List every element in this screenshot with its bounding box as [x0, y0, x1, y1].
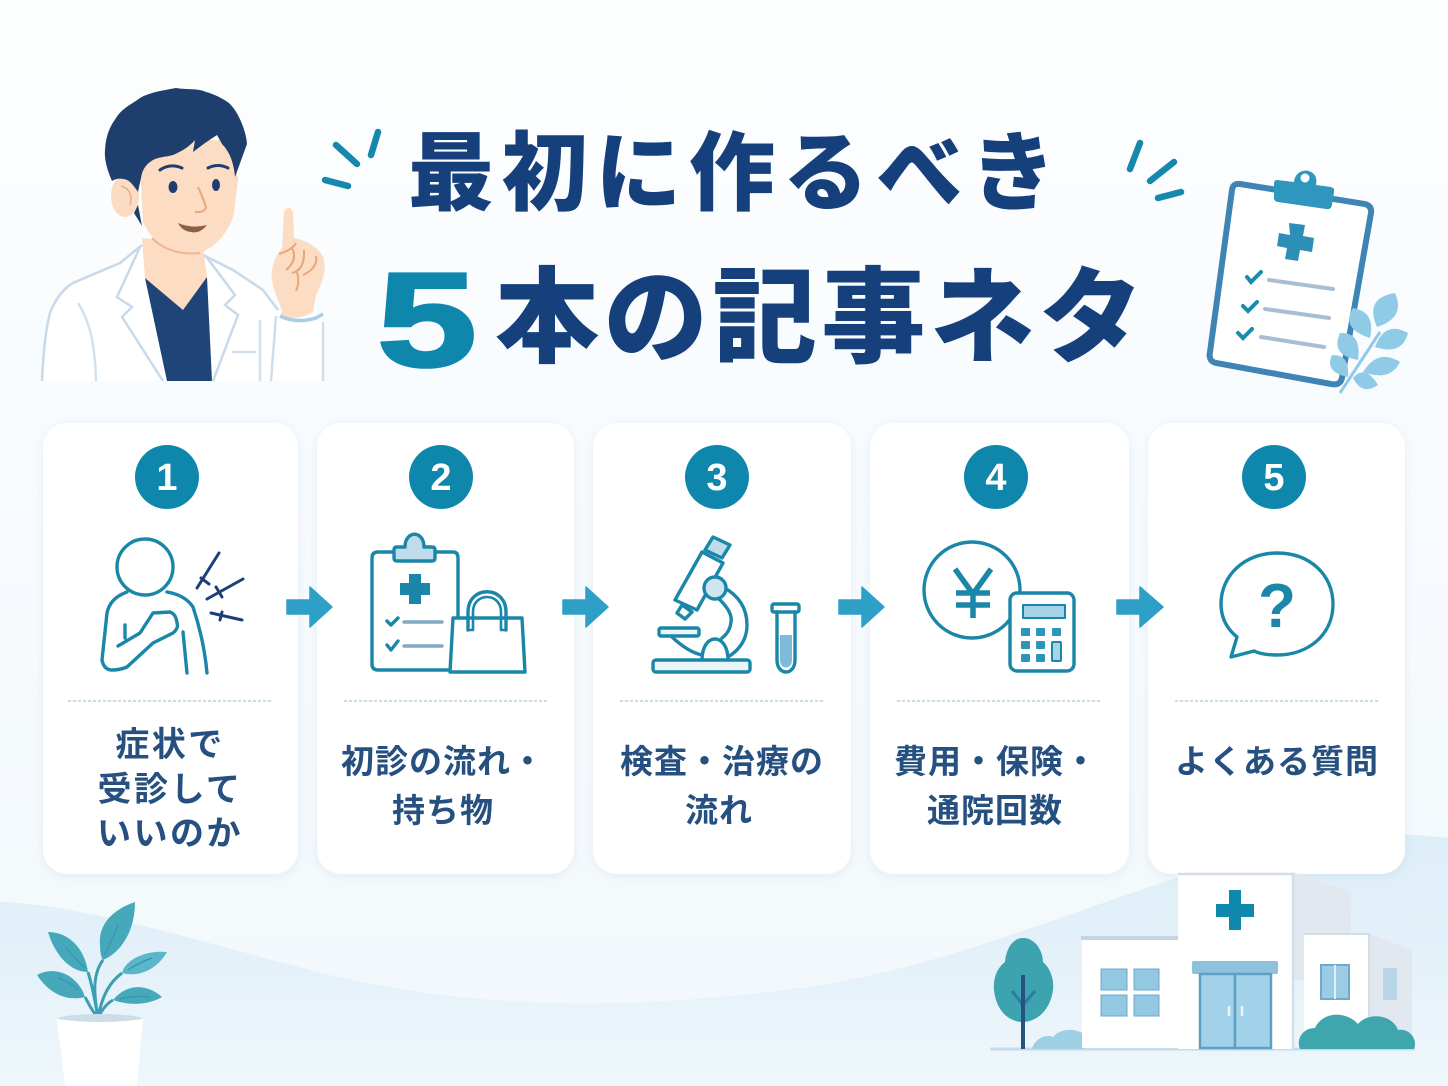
door [1200, 974, 1271, 1048]
hair [105, 88, 247, 192]
label: 流れ [685, 792, 753, 829]
main block [1178, 873, 1293, 1049]
icon: question bubble [1221, 553, 1333, 657]
arrow 2 [563, 587, 608, 627]
card 1 [43, 423, 298, 874]
icon: microscope and test tube [653, 537, 799, 672]
bush right [1299, 1015, 1415, 1049]
icon: yen and calculator [924, 542, 1074, 671]
label: 受診して [98, 771, 242, 809]
icon: clipboard and bag [372, 534, 525, 672]
lapels [117, 247, 238, 381]
badge 2 [409, 445, 473, 509]
badge 2: 2 [430, 457, 452, 499]
title: 本の記事ネタ [495, 261, 1143, 377]
badge 4 [964, 445, 1028, 509]
cross [1216, 890, 1254, 930]
card 4 [870, 423, 1129, 874]
title: 最初に作るべき [408, 126, 1056, 222]
sparkle lines right [1130, 143, 1181, 198]
badge 1: 1 [156, 457, 178, 499]
badge 3 [685, 445, 749, 509]
divider [897, 700, 1102, 702]
canopy [1192, 961, 1278, 974]
clipboard illustration [1210, 171, 1371, 384]
divider [68, 700, 272, 702]
badge 5 [1242, 445, 1306, 509]
potted plant [37, 902, 167, 1086]
left wing [1082, 938, 1180, 1048]
card 5 [1148, 423, 1405, 874]
divider [1175, 700, 1380, 702]
background wave [0, 835, 1448, 1086]
badge 4: 4 [985, 457, 1007, 499]
doctor illustration [42, 88, 325, 381]
hand [272, 208, 325, 318]
label: 症状で [115, 726, 225, 764]
sleeve [272, 312, 324, 381]
side wall [1293, 872, 1351, 980]
title: 5 [377, 245, 477, 395]
arrow 3 [839, 587, 884, 627]
right wing [1368, 933, 1412, 1048]
label: 費用・保険・ [894, 743, 1098, 780]
label: 持ち物 [392, 792, 494, 829]
neck [142, 238, 207, 310]
label: 通院回数 [927, 792, 1063, 829]
title [377, 126, 1143, 395]
face [140, 140, 238, 255]
white coat [42, 245, 278, 381]
tree [994, 938, 1053, 1049]
scrubs [145, 277, 212, 381]
left window [1101, 969, 1159, 1016]
card 2 [317, 423, 574, 874]
label: いいのか [97, 815, 243, 853]
icon: question bubble: ? [1258, 572, 1296, 641]
icon: person with chest pain [102, 539, 243, 673]
label: 初診の流れ・ [341, 743, 545, 780]
arrow 1 [287, 587, 332, 627]
divider [620, 700, 824, 702]
sparkle lines left [325, 132, 378, 186]
face details [160, 166, 228, 170]
label: 検査・治療の [620, 743, 824, 780]
ear [111, 175, 139, 217]
badge 5: 5 [1263, 457, 1285, 499]
card 3 [593, 423, 851, 874]
arrow 4 [1117, 587, 1163, 627]
label: よくある質問 [1175, 743, 1379, 780]
badge 1 [135, 445, 199, 509]
leaf sprig [1330, 293, 1408, 393]
clinic building [990, 872, 1415, 1049]
divider [344, 700, 548, 702]
bush left [1032, 1030, 1084, 1049]
badge 3: 3 [706, 457, 728, 499]
